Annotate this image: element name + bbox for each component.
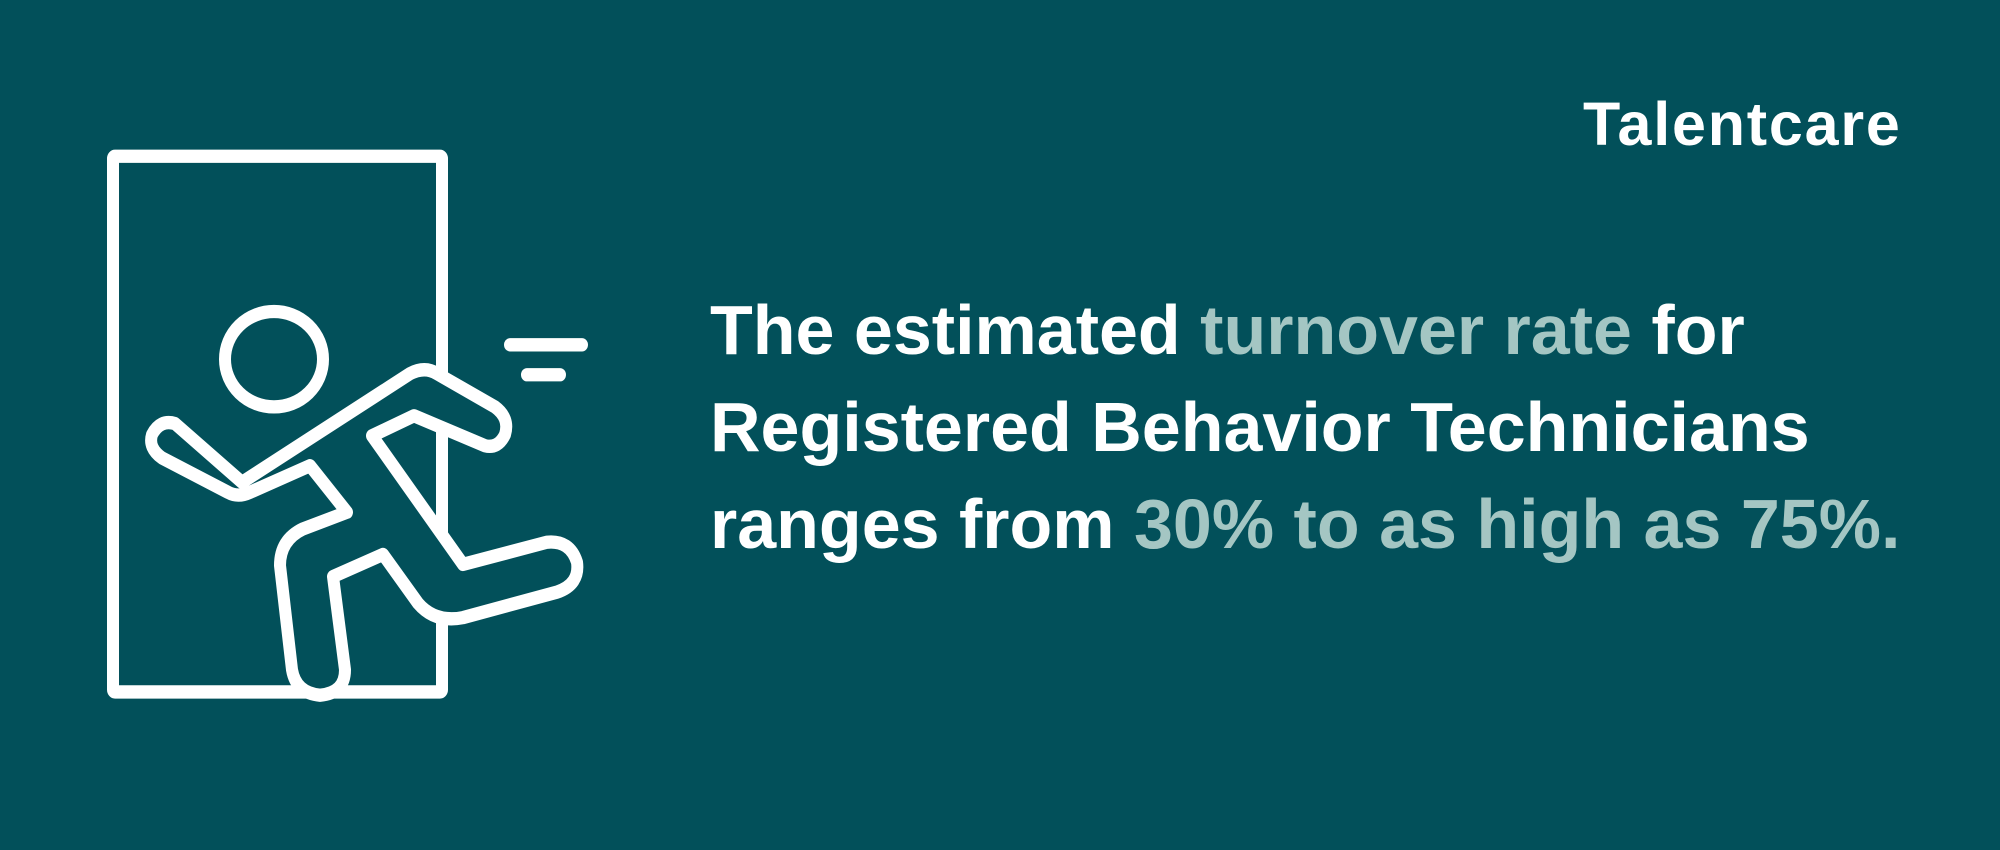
headline text bbox=[710, 291, 1900, 563]
headline text: The estimated turnover rate for bbox=[710, 291, 1745, 369]
headline text: Registered Behavior Technicians bbox=[710, 388, 1810, 466]
headline text: ranges from 30% to as high as 75%. bbox=[710, 485, 1900, 563]
logo: Talentcare bbox=[1583, 90, 1902, 158]
